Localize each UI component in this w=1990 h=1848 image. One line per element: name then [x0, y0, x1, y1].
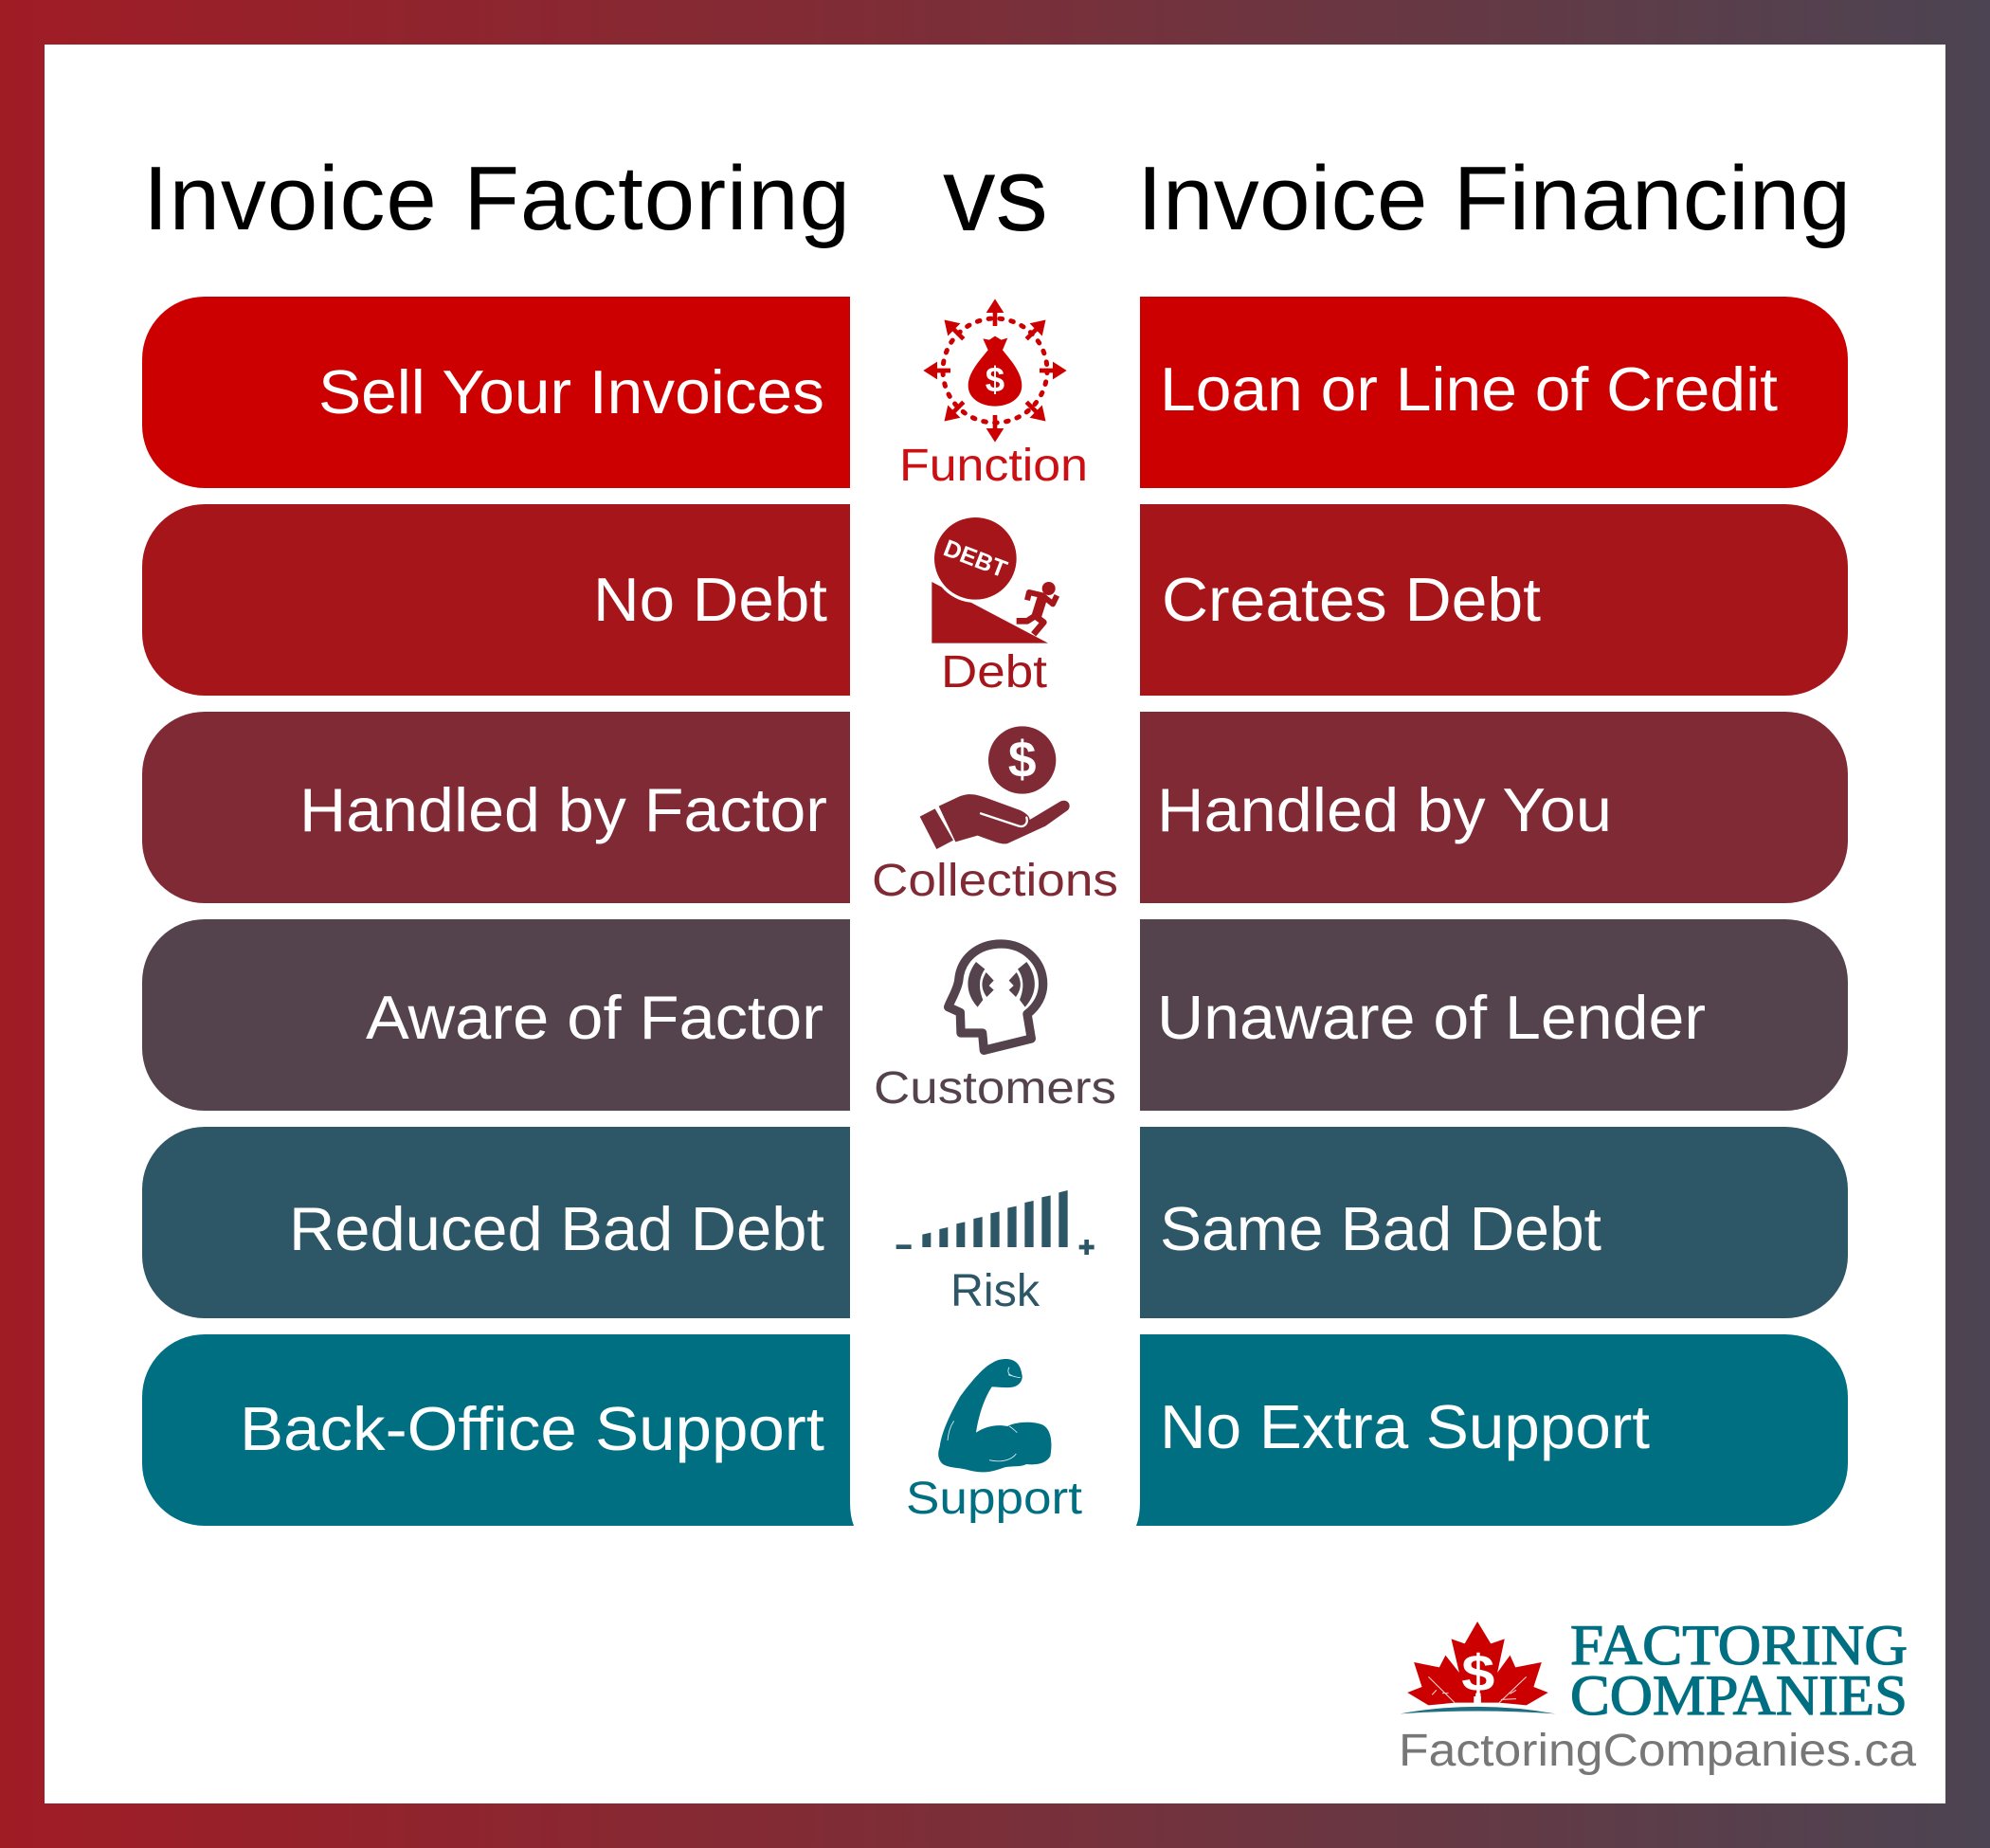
icon: hand holding coin: $: [1008, 732, 1037, 788]
icon: debt boulder and runner: DEBT: [940, 535, 1011, 584]
panel: factoring collections: [142, 712, 850, 903]
icon: flexed arm: [938, 1359, 1051, 1472]
text: Handled by Factor: Handled by Factor: [299, 775, 827, 844]
logo: Factoring Companies: [1399, 1614, 1916, 1776]
logo text: FACTORING: FACTORING: [1570, 1614, 1908, 1676]
label: Function: Function: [899, 441, 1088, 491]
text: Unaware of Lender: Unaware of Lender: [1157, 983, 1706, 1052]
row: Function: [142, 297, 1848, 491]
panel: financing risk: [1140, 1127, 1848, 1318]
icon: maple leaf with dollar sign: [1401, 1622, 1555, 1713]
label: Support: Support: [906, 1474, 1082, 1524]
label: Debt: Debt: [941, 647, 1047, 698]
panel: factoring support: [142, 1334, 854, 1526]
text: Sell Your Invoices: Sell Your Invoices: [318, 357, 824, 426]
panel: factoring risk: [142, 1127, 850, 1318]
heading: Invoice Financing: Invoice Financing: [1137, 148, 1851, 249]
row: Support: [142, 1334, 1848, 1526]
panel: financing function: [1140, 297, 1848, 488]
icon: debt boulder and runner: [932, 515, 1057, 643]
panel: financing customers: [1140, 919, 1848, 1111]
text: No Extra Support: No Extra Support: [1160, 1392, 1650, 1461]
icon: money bag with arrows: $: [986, 360, 1004, 399]
panel: factoring debt: [142, 504, 850, 696]
heading: vs: vs: [943, 136, 1048, 253]
label: Collections: Collections: [872, 856, 1118, 906]
text: Same Bad Debt: Same Bad Debt: [1160, 1194, 1601, 1263]
logo text: COMPANIES: COMPANIES: [1570, 1664, 1908, 1727]
text: Handled by You: Handled by You: [1157, 775, 1612, 844]
text: Creates Debt: Creates Debt: [1162, 565, 1541, 634]
panel: financing support: [1136, 1334, 1848, 1526]
icon: money bag with arrows: [923, 299, 1067, 443]
icon: hand holding coin: [920, 726, 1070, 849]
panel: factoring customers: [142, 919, 850, 1111]
label: Risk: Risk: [950, 1266, 1040, 1316]
text: Reduced Bad Debt: Reduced Bad Debt: [289, 1194, 824, 1263]
text: Loan or Line of Credit: Loan or Line of Credit: [1160, 354, 1778, 424]
text: No Debt: No Debt: [593, 565, 827, 634]
icon: head with signal arcs: [949, 944, 1043, 1050]
title row: [143, 136, 1851, 253]
row: Customers: [142, 919, 1848, 1114]
panel: factoring function: [142, 297, 850, 488]
text: Aware of Factor: Aware of Factor: [366, 983, 823, 1052]
row: Debt: [142, 504, 1848, 698]
heading: Invoice Factoring: Invoice Factoring: [143, 148, 850, 249]
icon: maple leaf with dollar sign: $: [1461, 1644, 1494, 1703]
icon: rising risk bars: [896, 1190, 1094, 1255]
panel: financing debt: [1140, 504, 1848, 696]
row: Risk: [142, 1127, 1848, 1318]
row: Collections: [142, 712, 1848, 906]
panel: financing collections: [1140, 712, 1848, 903]
text: Back-Office Support: Back-Office Support: [240, 1394, 824, 1463]
website: FactoringCompanies.ca: FactoringCompanies.ca: [1399, 1726, 1916, 1776]
label: Customers: Customers: [874, 1063, 1116, 1114]
